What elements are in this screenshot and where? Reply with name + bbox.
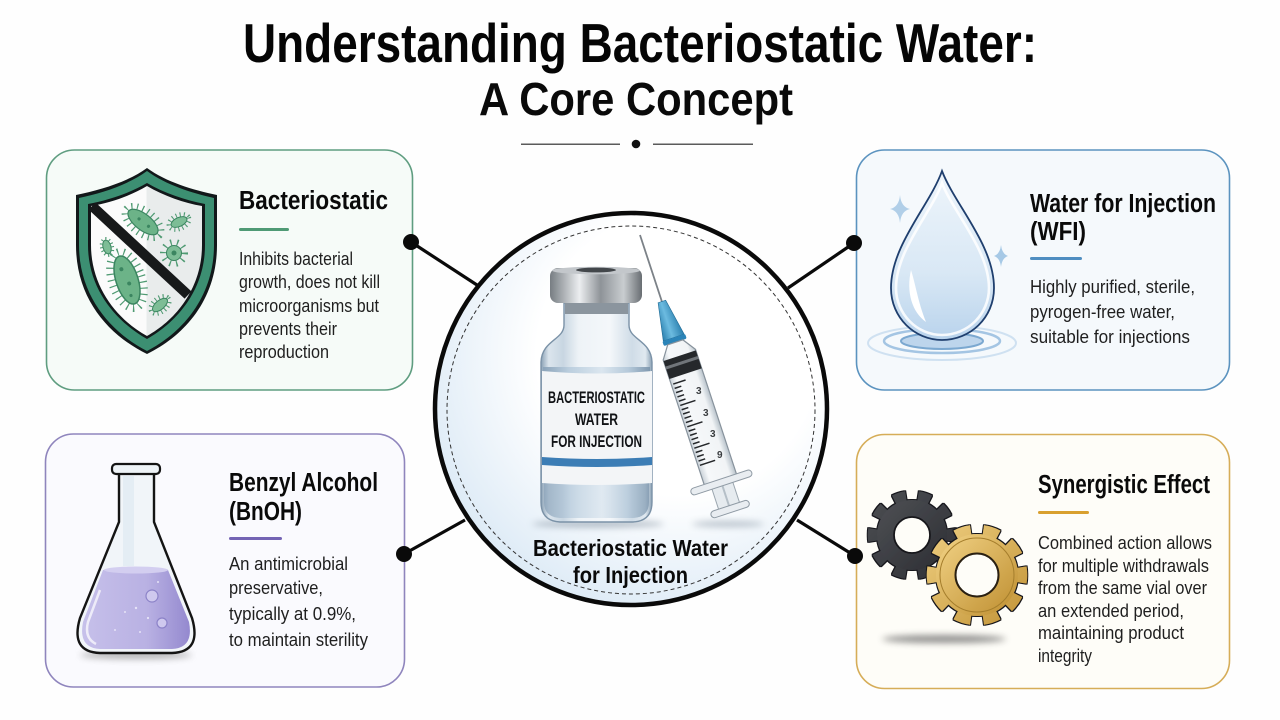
bacteria: [100, 200, 191, 317]
description: for multiple withdrawals: [1038, 555, 1209, 576]
heading: [229, 469, 378, 526]
icon: water drop: [868, 171, 1016, 360]
description: to maintain sterility: [229, 629, 369, 650]
description: [239, 248, 380, 362]
description: prevents their: [239, 318, 337, 339]
icon: gears: [872, 496, 1022, 643]
vial label: BACTERIOSTATIC: [548, 388, 645, 407]
circle caption: [533, 535, 728, 588]
description: An antimicrobial: [229, 553, 348, 574]
icon: syringe: 3: [703, 408, 709, 419]
description: an extended period,: [1038, 600, 1184, 621]
panel: synergistic effect: [856, 434, 1230, 688]
heading: (BnOH): [229, 498, 302, 526]
accent bar: [239, 228, 289, 231]
description: Highly purified, sterile,: [1030, 276, 1195, 297]
connector lines: [404, 242, 855, 556]
title divider: [521, 140, 753, 148]
description: typically at 0.9%,: [229, 603, 356, 624]
title: [243, 12, 1037, 125]
description: suitable for injections: [1030, 326, 1190, 347]
description: from the same vial over: [1038, 577, 1207, 598]
central circle: [435, 213, 827, 605]
accent bar: [229, 537, 282, 540]
dark gear: [872, 496, 952, 574]
description: growth, does not kill: [239, 271, 380, 292]
heading: (WFI): [1030, 218, 1086, 246]
panel: bacteriostatic: [46, 150, 412, 390]
gold gear: [932, 530, 1022, 620]
circle caption: for Injection: [573, 562, 688, 588]
vial cap: [550, 267, 642, 303]
icon: syringe: 3: [696, 386, 702, 397]
description: [1030, 276, 1195, 347]
icon: syringe: 3: [710, 429, 716, 440]
circle caption: Bacteriostatic Water: [533, 535, 728, 561]
description: Inhibits bacterial: [239, 248, 353, 269]
title: A Core Concept: [479, 73, 793, 125]
icon: syringe: 9: [717, 450, 723, 461]
heading: [1030, 190, 1216, 246]
description: [229, 553, 369, 650]
accent bar: [1038, 511, 1089, 514]
heading: Bacteriostatic: [239, 187, 388, 215]
heading: Water for Injection: [1030, 190, 1216, 218]
panel: benzyl alcohol: [46, 434, 404, 687]
description: preservative,: [229, 577, 323, 598]
heading: Synergistic Effect: [1038, 471, 1210, 499]
accent bar: [1030, 257, 1082, 260]
sparkles: [890, 195, 910, 223]
icon: flask: [78, 464, 194, 659]
title: Understanding Bacteriostatic Water:: [243, 12, 1037, 74]
icon: shield with bacteria: [76, 168, 217, 354]
description: pyrogen-free water,: [1030, 301, 1175, 322]
heading: Benzyl Alcohol: [229, 469, 378, 497]
connector dots: [396, 234, 863, 564]
description: [1038, 532, 1212, 666]
icon: syringe: [610, 225, 764, 527]
description: Combined action allows: [1038, 532, 1212, 553]
description: integrity: [1038, 645, 1093, 666]
description: reproduction: [239, 341, 329, 362]
panel: water for injection: [856, 150, 1230, 390]
vial label: [542, 371, 652, 485]
vial label: FOR INJECTION: [551, 432, 642, 451]
description: maintaining product: [1038, 622, 1184, 643]
icon: vial: [532, 267, 664, 528]
description: microorganisms but: [239, 295, 379, 316]
vial label: WATER: [575, 410, 618, 429]
